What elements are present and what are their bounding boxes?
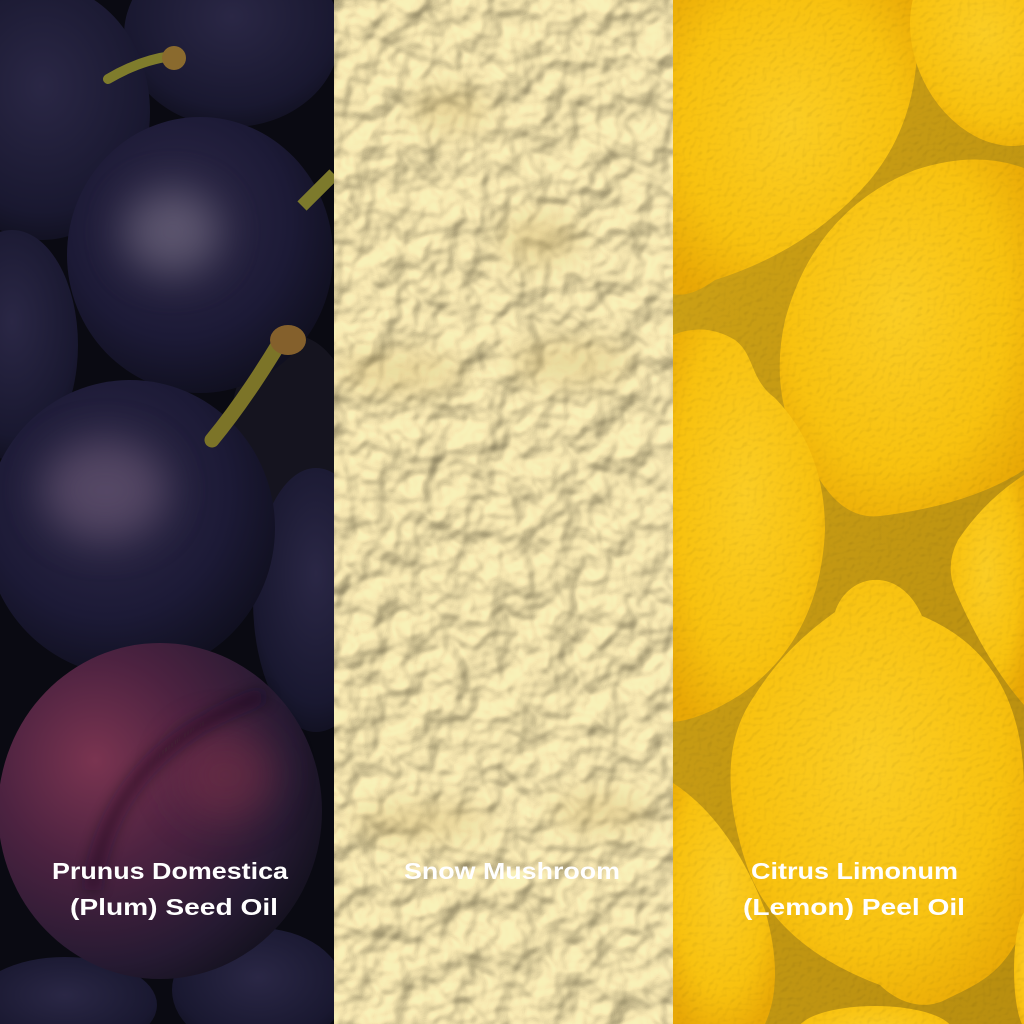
label: lemon: Citrus Limonum — [751, 858, 958, 884]
plum left edge — [0, 230, 78, 460]
mushroom texture — [334, 0, 673, 1024]
plum middle highlight — [43, 440, 167, 540]
plum crease — [92, 695, 265, 890]
label: plum — [52, 858, 288, 920]
plum bottom right — [172, 928, 344, 1024]
plum top centre — [124, 0, 340, 127]
mushroom shaded patches — [335, 90, 650, 838]
plum right middle — [253, 468, 334, 732]
stem tip middle — [270, 325, 306, 355]
plum upper highlight — [124, 190, 220, 274]
stem tip top left — [162, 46, 186, 70]
stem top left — [108, 56, 172, 79]
lemon peel texture — [673, 0, 1024, 1024]
plum far bottom left — [0, 957, 157, 1024]
lemon bottom peek — [797, 1006, 953, 1024]
label: lemon — [743, 858, 965, 920]
lemon top — [673, 0, 917, 295]
lemon right peek — [1014, 910, 1024, 1024]
panel: lemon — [673, 0, 1024, 1024]
label: plum: (Plum) Seed Oil — [70, 894, 278, 920]
label: plum: Prunus Domestica — [52, 858, 288, 884]
lemon mid right — [780, 159, 1024, 516]
lemon bottom — [731, 580, 1024, 1005]
lemon bottom left — [673, 783, 775, 1024]
lemon right edge — [951, 475, 1024, 705]
mushroom warm tint — [334, 0, 673, 1024]
panel: snow mushroom — [334, 0, 673, 1024]
plum red sheen — [175, 730, 275, 820]
stem upper centre — [302, 174, 334, 206]
plum middle — [0, 380, 275, 676]
labels — [52, 858, 965, 920]
lemon left — [673, 330, 825, 722]
label: snow mushroom: Snow Mushroom — [404, 858, 620, 884]
label: lemon: (Lemon) Peel Oil — [743, 894, 965, 920]
plum large red — [0, 643, 322, 979]
stem middle — [212, 342, 280, 440]
plum behind centre right — [234, 338, 334, 503]
plum upper centre — [67, 117, 333, 393]
panel: plum — [0, 0, 334, 1024]
plum top left — [0, 0, 150, 240]
lemon top right — [910, 0, 1024, 146]
